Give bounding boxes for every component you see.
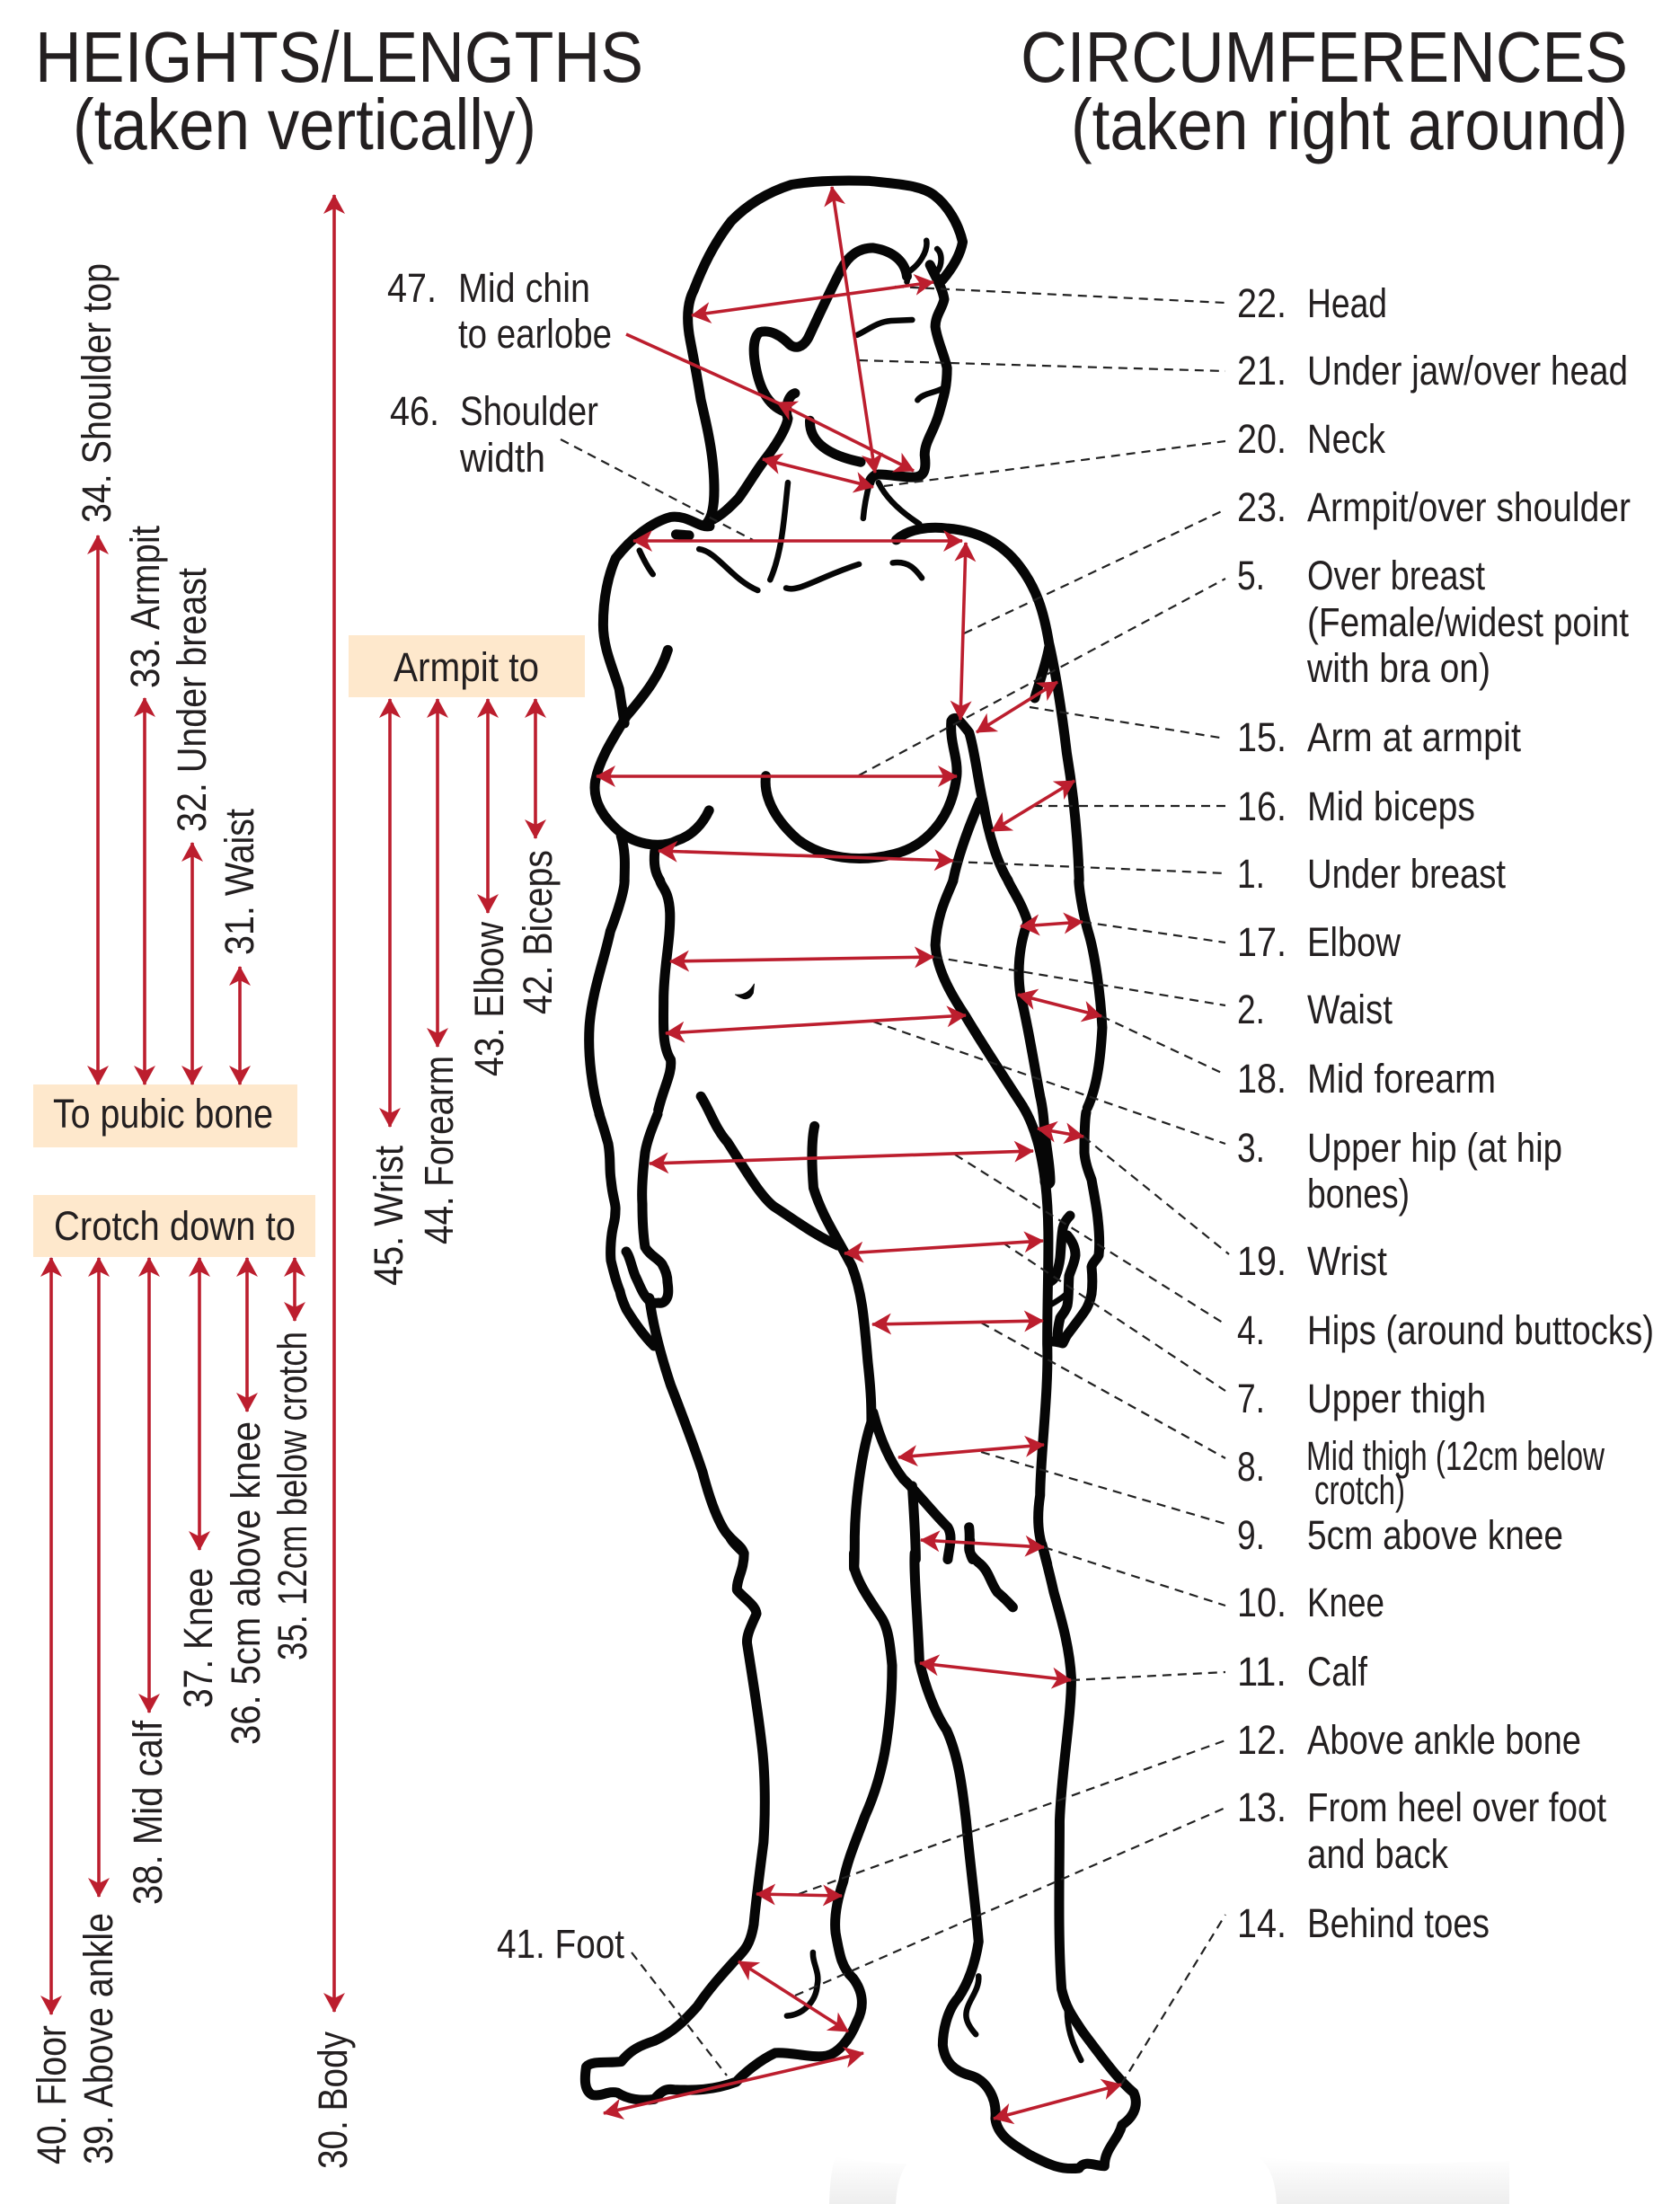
circumference list: Head	[1307, 280, 1387, 326]
plain red line from mid chin label	[626, 334, 777, 403]
label: 47 mid chin to earlobe	[387, 265, 612, 357]
heading: heights and lengths: HEIGHTS/LENGTHS	[35, 17, 643, 97]
circumference list: 15.	[1237, 714, 1287, 760]
vertical labels: crotch down to group: 36. 5cm above knee	[223, 1421, 269, 1745]
vertical labels: armpit to group: 45. Wrist	[366, 1146, 411, 1286]
body figure outline	[585, 181, 1136, 2169]
label: 46 shoulder width: Shoulder	[460, 388, 598, 434]
label box: Crotch down to	[33, 1195, 315, 1257]
dashed leader lines	[561, 287, 1229, 2085]
circumference list: 5.	[1237, 553, 1265, 598]
left hand	[599, 1114, 668, 1346]
circumference list: 18.	[1237, 1056, 1287, 1102]
circumference list: 17.	[1237, 919, 1287, 965]
vertical labels: armpit to group: 44. Forearm	[416, 1056, 462, 1244]
vertical labels: to pubic bone group: 31. Waist	[217, 809, 262, 955]
circumference list: 10.	[1237, 1580, 1287, 1625]
circumference list: 11.	[1237, 1649, 1287, 1695]
red measurement arrows on body	[597, 187, 1121, 2119]
circumference list: Under jaw/over head	[1307, 348, 1628, 394]
heading: heights and lengths: (taken vertically)	[73, 84, 536, 164]
circumference list: 14.	[1237, 1900, 1287, 1946]
label box: To pubic bone	[33, 1084, 297, 1147]
label: 46 shoulder width: 46.	[390, 388, 439, 434]
circumference list: 1.	[1237, 851, 1265, 897]
vertical labels: crotch down to group: 40. Floor	[29, 2025, 75, 2164]
circumference list: 9.	[1237, 1512, 1265, 1558]
circumference list: 20.	[1237, 416, 1287, 462]
vertical height arrows	[51, 195, 535, 2014]
label: 46 shoulder width	[390, 388, 598, 481]
circumference list: 16.	[1237, 783, 1287, 829]
circumference list: 13.	[1237, 1784, 1287, 1830]
circumference list: Calf	[1307, 1649, 1367, 1695]
circumference list: 7.	[1237, 1376, 1265, 1421]
circumference list: Behind toes	[1307, 1900, 1490, 1946]
circumference list: Mid biceps	[1307, 783, 1475, 829]
vertical labels: crotch down to group	[29, 1332, 315, 2164]
circumference list: Upper hip (at hip	[1307, 1125, 1562, 1171]
circumference list: Wrist	[1307, 1238, 1387, 1284]
circumference list: From heel over foot	[1307, 1784, 1606, 1830]
circumference list: 21.	[1237, 348, 1287, 394]
circumference list	[1237, 280, 1654, 1946]
heading: heights and lengths	[35, 17, 643, 164]
circumference list: Upper thigh	[1307, 1376, 1486, 1421]
vertical labels: to pubic bone group: 33. Armpit	[122, 526, 168, 688]
label: 47 mid chin to earlobe: 47.	[387, 265, 437, 311]
vertical labels: crotch down to group: 39. Above ankle	[75, 1913, 121, 2164]
label: 47 mid chin to earlobe: to earlobe	[458, 311, 612, 357]
circumference list: bones)	[1307, 1171, 1410, 1217]
circumference list: and back	[1307, 1831, 1448, 1877]
circumference list: Over breast	[1307, 553, 1485, 598]
vertical labels: crotch down to group: 35. 12cm below crotch	[270, 1332, 315, 1660]
label: 41 foot: 41. Foot	[497, 1921, 624, 1967]
circumference list: 3.	[1237, 1125, 1265, 1171]
circumference list: Knee	[1307, 1580, 1384, 1625]
circumference list: Armpit/over shoulder	[1307, 484, 1631, 530]
circumference list: 12.	[1237, 1717, 1287, 1763]
vertical labels: armpit to group: 42. Biceps	[515, 850, 561, 1014]
label box: Armpit to: Armpit to	[393, 644, 539, 690]
circumference list: 23.	[1237, 484, 1287, 530]
label box: To pubic bone: To pubic bone	[53, 1091, 273, 1137]
label box: Crotch down to: Crotch down to	[54, 1203, 296, 1249]
circumference list: 8.	[1237, 1444, 1265, 1490]
circumference list: crotch)	[1314, 1467, 1405, 1513]
vertical labels: to pubic bone group	[74, 263, 262, 955]
heading: circumferences	[1021, 17, 1628, 164]
vertical labels: armpit to group	[366, 850, 561, 1286]
circumference list: Under breast	[1307, 851, 1506, 897]
vertical labels: crotch down to group: 38. Mid calf	[125, 1721, 171, 1905]
heading: circumferences: CIRCUMFERENCES	[1021, 17, 1628, 97]
circumference list: with bra on)	[1306, 645, 1490, 691]
heading: circumferences: (taken right around)	[1071, 84, 1628, 164]
circumference list: Arm at armpit	[1307, 714, 1521, 760]
circumference list: 5cm above knee	[1307, 1512, 1563, 1558]
circumference list: Neck	[1307, 416, 1385, 462]
right hand	[1043, 1112, 1100, 1343]
vertical labels: crotch down to group: 37. Knee	[175, 1568, 221, 1708]
circumference list: 4.	[1237, 1307, 1265, 1353]
label box: Armpit to	[349, 635, 585, 697]
label: 46 shoulder width: width	[459, 435, 545, 481]
vertical labels: to pubic bone group: 34. Shoulder top	[74, 263, 119, 523]
circumference list: Elbow	[1307, 919, 1401, 965]
circumference list: Mid forearm	[1307, 1056, 1496, 1102]
circumference list: 22.	[1237, 280, 1287, 326]
circumference list: Above ankle bone	[1307, 1717, 1581, 1763]
label: 47 mid chin to earlobe: Mid chin	[458, 265, 590, 311]
circumference list: 19.	[1237, 1238, 1287, 1284]
circumference list: 2.	[1237, 987, 1265, 1032]
vertical label: body: 30. Body	[310, 2031, 356, 2169]
vertical labels: to pubic bone group: 32. Under breast	[169, 568, 215, 832]
faint floor shading	[829, 2156, 1509, 2204]
circumference list: (Female/widest point	[1307, 599, 1629, 645]
circumference list: Waist	[1307, 987, 1393, 1032]
vertical labels: armpit to group: 43. Elbow	[466, 922, 512, 1076]
